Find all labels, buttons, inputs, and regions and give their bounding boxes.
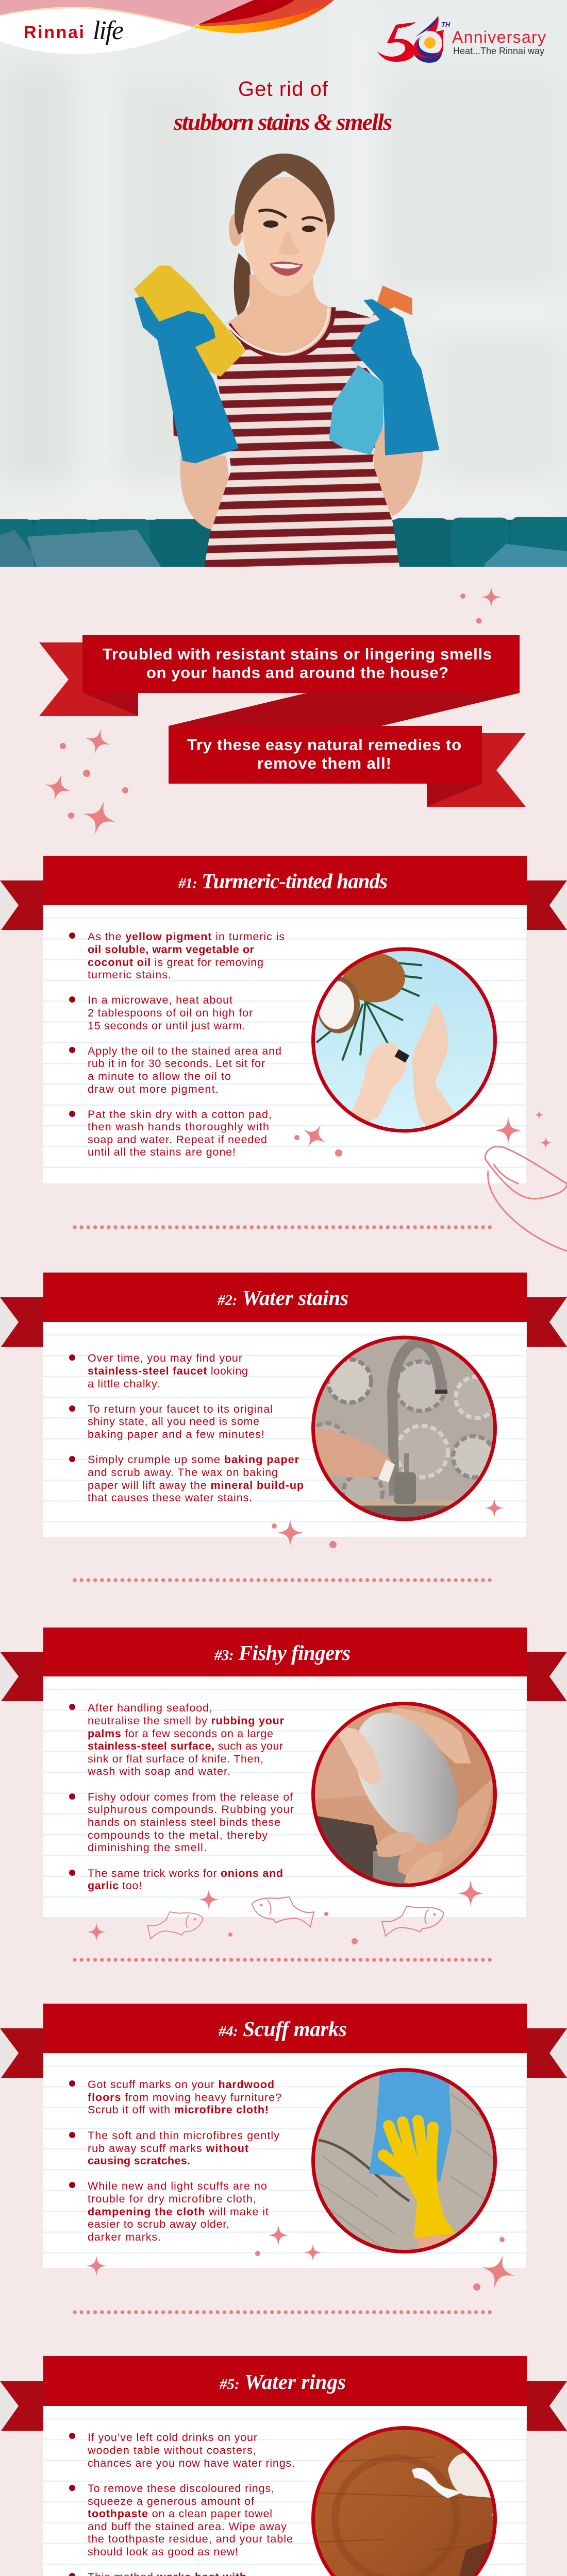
bullet text (69, 2431, 295, 2469)
bullet text (69, 2180, 269, 2243)
logo: Rinnai life (24, 16, 124, 45)
bullet text (69, 1352, 248, 1390)
divider (75, 2310, 491, 2314)
bullet text: Over time, you may find your (88, 1352, 242, 1364)
bullet text: To remove these discoloured rings, (88, 2482, 274, 2495)
logo: 50th Anniversary (377, 15, 546, 63)
logo: Rinnai life: life (93, 16, 124, 45)
blue gloved left hand (135, 296, 239, 463)
divider (75, 1578, 491, 1582)
bullet text: Got scuff marks on your hardwood (88, 2078, 274, 2091)
woman (173, 154, 423, 567)
hero photo: woman with cleaning supplies (0, 0, 567, 567)
bullet text: oil soluble, warm vegetable or (88, 943, 255, 956)
icon: fingernail outline (485, 1147, 567, 1251)
icon: fish outlines (147, 1897, 444, 1939)
logo: 50th Anniversary: TH (441, 21, 451, 28)
bullet text: While new and light scuffs are no (88, 2180, 267, 2192)
bullet text: hands on stainless steel binds these (88, 1816, 280, 1828)
bullet text: draw out more pigment. (88, 1083, 219, 1095)
header ribbon (0, 2004, 567, 2078)
bullet text: rub away scuff marks without (88, 2142, 248, 2155)
bullet text: sink or flat surface of knife. Then, (88, 1753, 263, 1765)
bullet text: turmeric stains. (88, 969, 171, 981)
bullet text: a little chalky. (88, 1378, 160, 1390)
header ribbon (0, 856, 567, 930)
intro question text: on your hands and around the house? (146, 664, 448, 682)
intro question text (103, 645, 492, 682)
bullet text: causing scratches. (88, 2155, 190, 2167)
bullet text: wash with soap and water. (87, 1765, 230, 1777)
header ribbon: #3: Fishy fingers (214, 1641, 351, 1665)
title (173, 78, 392, 135)
blue gloved right hand (351, 299, 439, 455)
bullet text (69, 1702, 285, 1777)
bullet text (69, 1403, 273, 1440)
bullet text: The soft and thin microfibres gently (88, 2129, 279, 2142)
sparkles (86, 2225, 519, 2292)
divider (75, 1958, 491, 1962)
sofa (0, 517, 567, 567)
bullet text: 2 tablespoons of oil on high for (88, 1007, 253, 1019)
bullet text: sulphurous compounds. Rubbing your (88, 1803, 294, 1816)
divider (75, 1225, 491, 1229)
bullet text (69, 1791, 294, 1854)
bullet text (69, 2078, 281, 2116)
bullet text: darker marks. (88, 2231, 161, 2243)
logo: 50th Anniversary: Heat...The Rinnai way (453, 46, 544, 56)
bullet text: To return your faucet to its original (88, 1403, 273, 1415)
panel: #2 water stains (0, 1273, 567, 1548)
intro remedy text: Try these easy natural remedies to (187, 736, 461, 754)
bullet text (69, 994, 253, 1032)
header ribbon: #4: Scuff marks (218, 2017, 347, 2041)
bullet text: neutralise the smell by rubbing your (88, 1715, 285, 1727)
header ribbon: #1: Turmeric-tinted hands (178, 869, 388, 893)
bullet text (69, 1867, 283, 1892)
bullet text: squeeze a generous amount of (88, 2495, 254, 2507)
header ribbon (0, 1628, 567, 1701)
bullet text (69, 930, 285, 981)
sparkles (294, 1110, 552, 1157)
header ribbon (0, 2356, 567, 2431)
bullet text: wooden table without coasters, (87, 2444, 256, 2456)
panel: #5 water rings (0, 2356, 567, 2576)
intro question text: Troubled with resistant stains or lingering smells (103, 645, 492, 663)
bullet text: shiny state, all you need is some (88, 1415, 259, 1428)
bullet text: the toothpaste residue, and your table (88, 2533, 293, 2545)
yellow cloth (134, 266, 246, 377)
bullet text: then wash hands thoroughly with (88, 1121, 269, 1133)
photo: water ring on wooden table (311, 2426, 499, 2576)
bullet text (69, 1108, 272, 1158)
intro remedy text (187, 736, 461, 772)
photo: gloved hand wiping floor (311, 2063, 497, 2259)
sparkles (272, 1498, 504, 1548)
header ribbon: #5: Water rings (219, 2370, 346, 2394)
title: Get rid of (238, 78, 328, 100)
bullet text: compounds to the metal, thereby (88, 1829, 268, 1841)
bullet text: trouble for dry microfibre cloth, (88, 2193, 256, 2205)
bullet text: floors from moving heavy furniture? (88, 2091, 281, 2104)
bullet text: stainless-steel faucet looking (88, 1365, 248, 1377)
window background (0, 0, 567, 567)
bullet text: and scrub away. The wax on baking (88, 1466, 278, 1479)
bullet text: After handling seafood, (88, 1702, 212, 1714)
bullet text: Simply crumple up some baking paper (88, 1453, 299, 1466)
bullet text (69, 2482, 293, 2558)
header ribbon (0, 1273, 567, 1347)
photo: stainless steel soap (311, 1694, 497, 1887)
bullet text (69, 1453, 304, 1504)
bullet text: until all the stains are gone! (88, 1146, 236, 1158)
bullet text: Pat the skin dry with a cotton pad, (88, 1108, 272, 1121)
panel: #4 scuff marks (0, 2004, 567, 2292)
bullet text: garlic too! (88, 1879, 142, 1892)
bullet text: If you’ve left cold drinks on your (88, 2431, 257, 2444)
logo: 50th Anniversary: Anniversary (452, 28, 546, 46)
panel: #3 fishy fingers (0, 1628, 567, 1944)
bullet text: rub it in for 30 seconds. Let sit for (88, 1057, 265, 1070)
intro ribbon (39, 635, 526, 807)
bullet text: 15 seconds or until just warm. (88, 1020, 245, 1032)
bullet text (69, 2129, 279, 2167)
bullet text: stainless-steel surface, such as your (88, 1740, 283, 1752)
photo: coconut and oil on hands (311, 947, 497, 1138)
bullet text: dampening the cloth will make it (88, 2206, 269, 2218)
bullet text: palms for a few seconds on a large (88, 1727, 273, 1740)
bullet text: chances are you now have water rings. (88, 2457, 295, 2469)
header ribbon: #2: Water stains (217, 1286, 348, 1310)
bullet text: As the yellow pigment in turmeric is (88, 930, 285, 943)
bullet text: Fishy odour comes from the release of (88, 1791, 293, 1803)
spray bottle (329, 285, 412, 455)
bullet text: should look as good as new! (88, 2546, 238, 2558)
intro sparkles (41, 587, 502, 838)
sparkles (87, 1880, 484, 1944)
bullet text: easier to scrub away older, (88, 2218, 229, 2230)
bullet text: Apply the oil to the stained area and (88, 1045, 281, 1057)
bullet text: soap and water. Repeat if needed (88, 1133, 267, 1146)
title: stubborn stains & smells (173, 109, 392, 135)
photo: kitchen faucet (309, 1335, 497, 1521)
top brand swoosh (0, 0, 334, 54)
bullet text: and buff the stained area. Wipe away (88, 2520, 287, 2533)
bullet text: coconut oil is great for removing (88, 956, 263, 969)
bullet text: Scrub it off with microfibre cloth! (88, 2104, 269, 2116)
bullet text: In a microwave, heat about (88, 994, 232, 1006)
logo: Rinnai life: Rinnai (24, 23, 84, 42)
bullet text: baking paper and a few minutes! (88, 1428, 264, 1440)
bullet text: diminishing the smell. (88, 1841, 207, 1854)
bullet text: that causes these water stains. (88, 1492, 252, 1504)
bullet text: a minute to allow the oil to (88, 1070, 231, 1082)
panel: #1 turmeric-tinted hands (0, 856, 567, 1251)
intro remedy text: remove them all! (257, 754, 391, 772)
bullet text (69, 1045, 281, 1095)
bullet text: The same trick works for onions and (88, 1867, 283, 1879)
bullet text: toothpaste on a clean paper towel (88, 2507, 272, 2520)
bullet text: paper will lift away the mineral build-up (88, 1479, 304, 1492)
